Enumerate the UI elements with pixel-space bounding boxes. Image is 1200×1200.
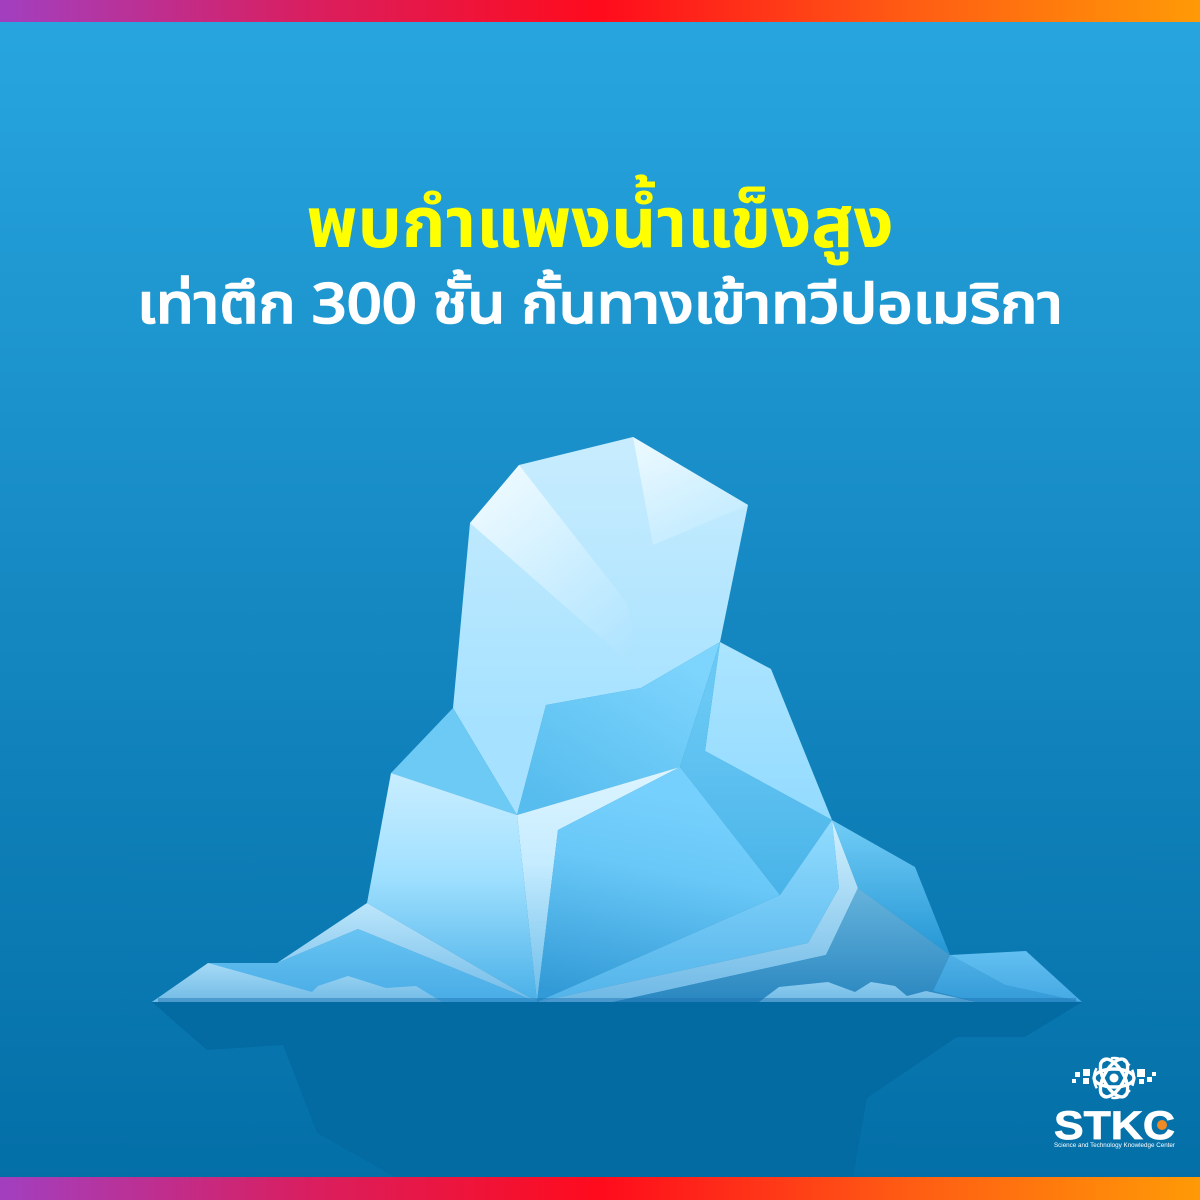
title line 2: เท่าตึก 300 ชั้น กั้นทางเข้าทวีปอเมริกา (137, 265, 1063, 348)
right lower facet (537, 820, 839, 1002)
upper block shadow facet (517, 642, 720, 815)
STKC logo (1054, 1055, 1175, 1149)
central block facet (537, 767, 780, 1002)
right block shadow facet (680, 642, 832, 895)
logo caption: Science and Technology Knowledge Center (1054, 1143, 1175, 1149)
highlight: centre sliver (517, 767, 680, 1002)
logo wordmark: STKC (1054, 1104, 1175, 1148)
bottom gradient bar (0, 1177, 1200, 1200)
left light band (277, 903, 537, 1002)
upper block main facets (453, 437, 748, 815)
iceberg above water (152, 437, 1082, 1002)
highlight: top right facet (633, 437, 748, 545)
right snow peaks (759, 982, 976, 1002)
highlight: upper left facet (470, 465, 640, 672)
left snow peaks (152, 963, 442, 1002)
right upper facet (832, 820, 950, 955)
title (137, 173, 1063, 348)
icon: atom (1094, 1055, 1134, 1101)
right block facet (705, 642, 832, 820)
dark right facet (613, 888, 976, 1002)
left shoulder facet (391, 708, 517, 815)
underwater iceberg (152, 1002, 1082, 1177)
left block facet (367, 773, 537, 1002)
icon: pixel squares (1072, 1069, 1156, 1084)
title line 1: พบกำแพงน้ำแข็งสูง (306, 173, 894, 279)
waterline (158, 998, 1076, 1002)
top gradient bar (0, 0, 1200, 22)
right light band (537, 820, 858, 1002)
far right lower facet (933, 955, 1082, 1002)
far right upper facet (950, 951, 1082, 1002)
logo dot (1157, 1120, 1167, 1130)
left base facet (152, 929, 537, 1002)
